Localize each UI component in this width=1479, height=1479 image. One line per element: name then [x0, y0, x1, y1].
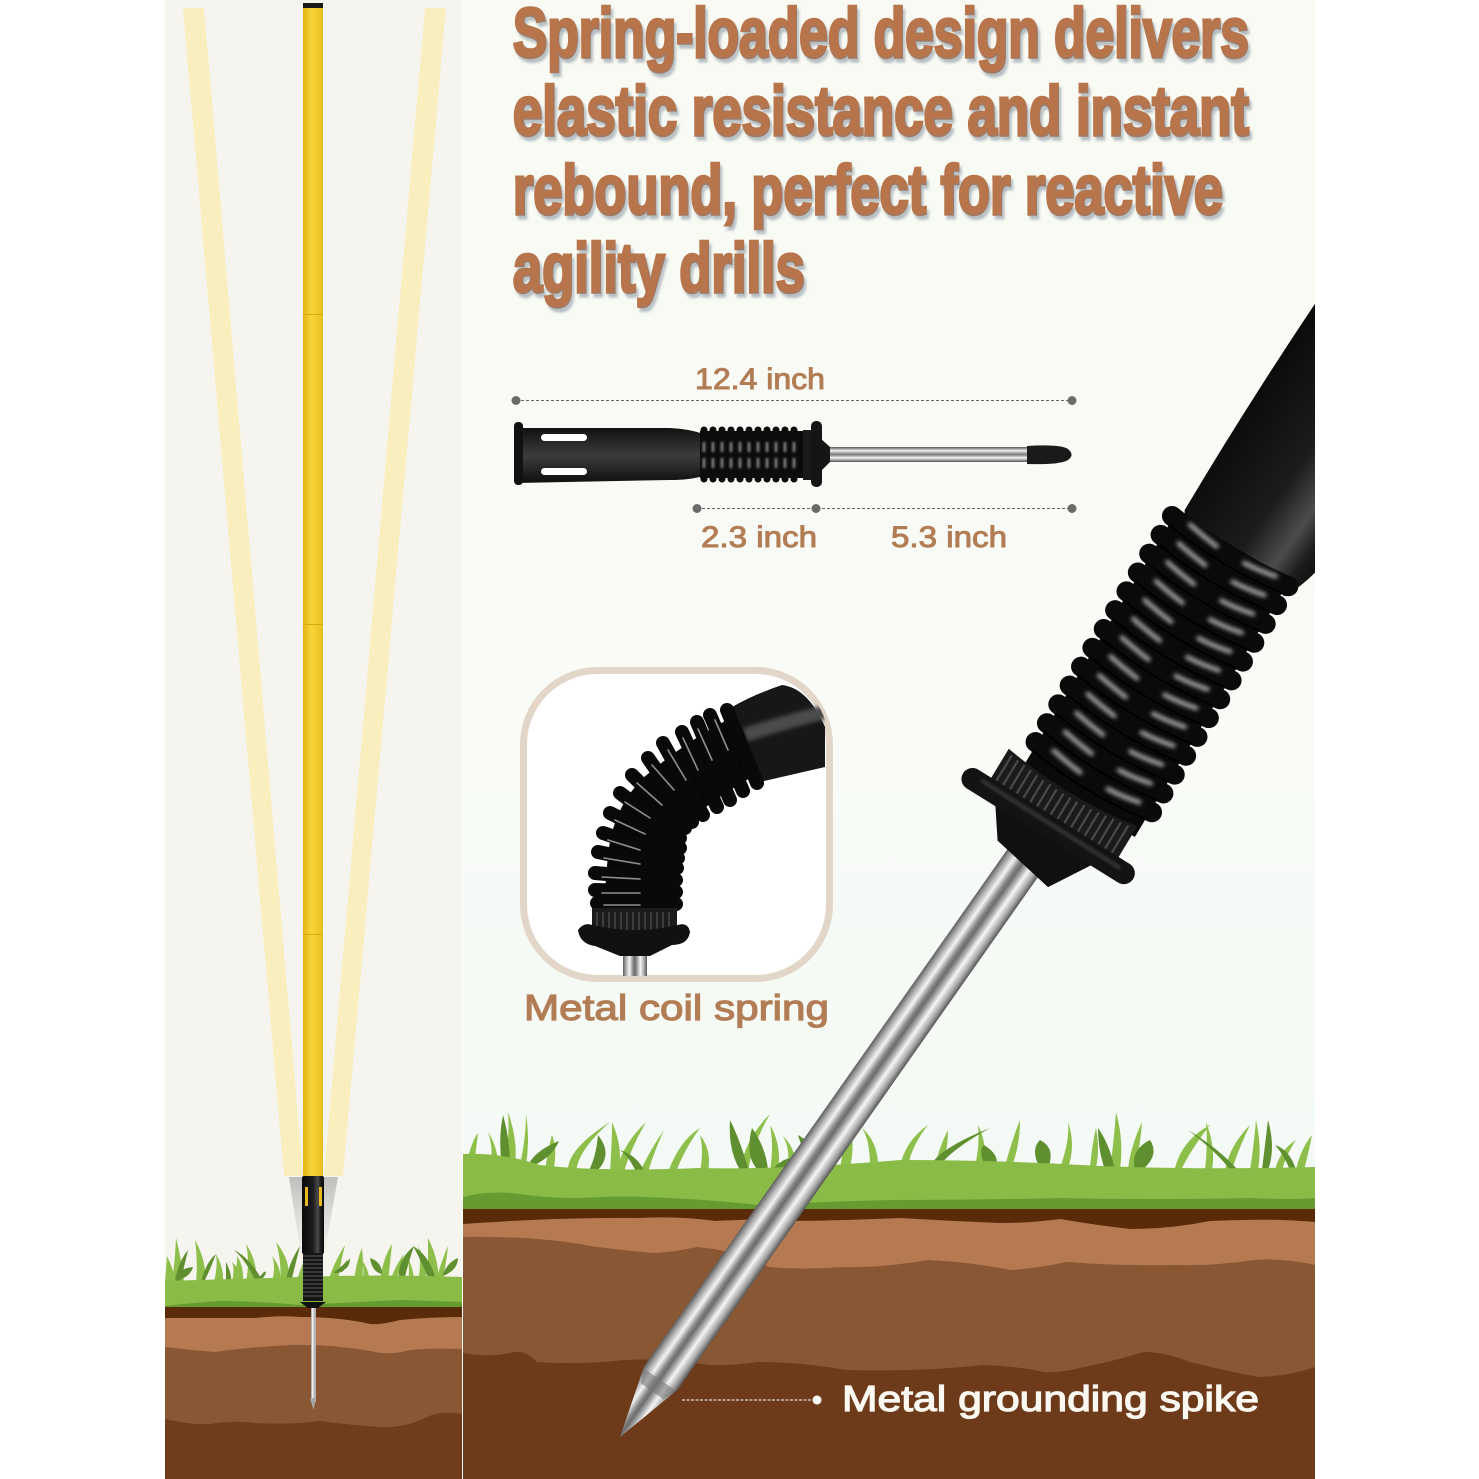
panel: right background [463, 0, 1315, 1479]
icon: grass blades right [466, 1112, 1312, 1174]
chart: dimension diagram [512, 363, 1076, 554]
callout: metal grounding spike: Metal grounding spike [842, 1378, 1259, 1419]
icon: yellow agility pole [303, 3, 323, 1176]
label: 2.3 inch: 2.3 inch [701, 521, 817, 554]
icon: bent coil spring [578, 685, 825, 978]
label: 12.4 inch: 12.4 inch [695, 363, 825, 396]
darkest soil right [463, 1345, 1315, 1479]
heading: rebound, perfect for reactive [513, 151, 1223, 229]
icon: small spike handle on pole [300, 1176, 326, 1410]
flange ring [972, 769, 1125, 881]
dark topsoil right [463, 1203, 1315, 1229]
icon: ghost handle fan [289, 1177, 338, 1262]
icon: ghost pole right [324, 8, 446, 1176]
label: metal coil spring: Metal coil spring [524, 987, 829, 1028]
mid soil right [463, 1225, 1315, 1377]
metal shaft [603, 842, 1046, 1449]
dimension line: total length [512, 396, 1076, 405]
light soil right [463, 1212, 1315, 1270]
icon: ghost pole left [183, 8, 303, 1176]
knurled collar [991, 748, 1137, 857]
panel: left background [165, 0, 462, 1479]
dark topsoil left [165, 1304, 462, 1324]
icon: large metal spike with black handle [600, 304, 1315, 1437]
mid soil left [165, 1340, 462, 1427]
coil spring [1020, 511, 1291, 838]
dark grass edge right [463, 1193, 1315, 1209]
hub [995, 806, 1091, 888]
light soil left [165, 1310, 462, 1353]
icon: spike handle side view [514, 421, 1072, 487]
callout: metal grounding spike [682, 1378, 1259, 1419]
darkest soil left [165, 1400, 462, 1479]
black handle body [1184, 304, 1315, 596]
icon: grass blades left [165, 1238, 458, 1282]
heading: agility drills [513, 229, 805, 307]
grass band right [463, 1154, 1315, 1207]
heading [513, 0, 1249, 307]
dark grass edge left [165, 1300, 462, 1307]
panel: left ground cross-section [165, 1238, 462, 1479]
dimension line: spring and spike [692, 504, 1076, 513]
panel: coil spring detail [524, 670, 830, 978]
grass band left [165, 1276, 462, 1307]
heading: elastic resistance and instant [513, 72, 1249, 150]
label: 5.3 inch: 5.3 inch [891, 521, 1007, 554]
panel: right ground cross-section [463, 1112, 1315, 1479]
rounded frame [524, 670, 830, 978]
